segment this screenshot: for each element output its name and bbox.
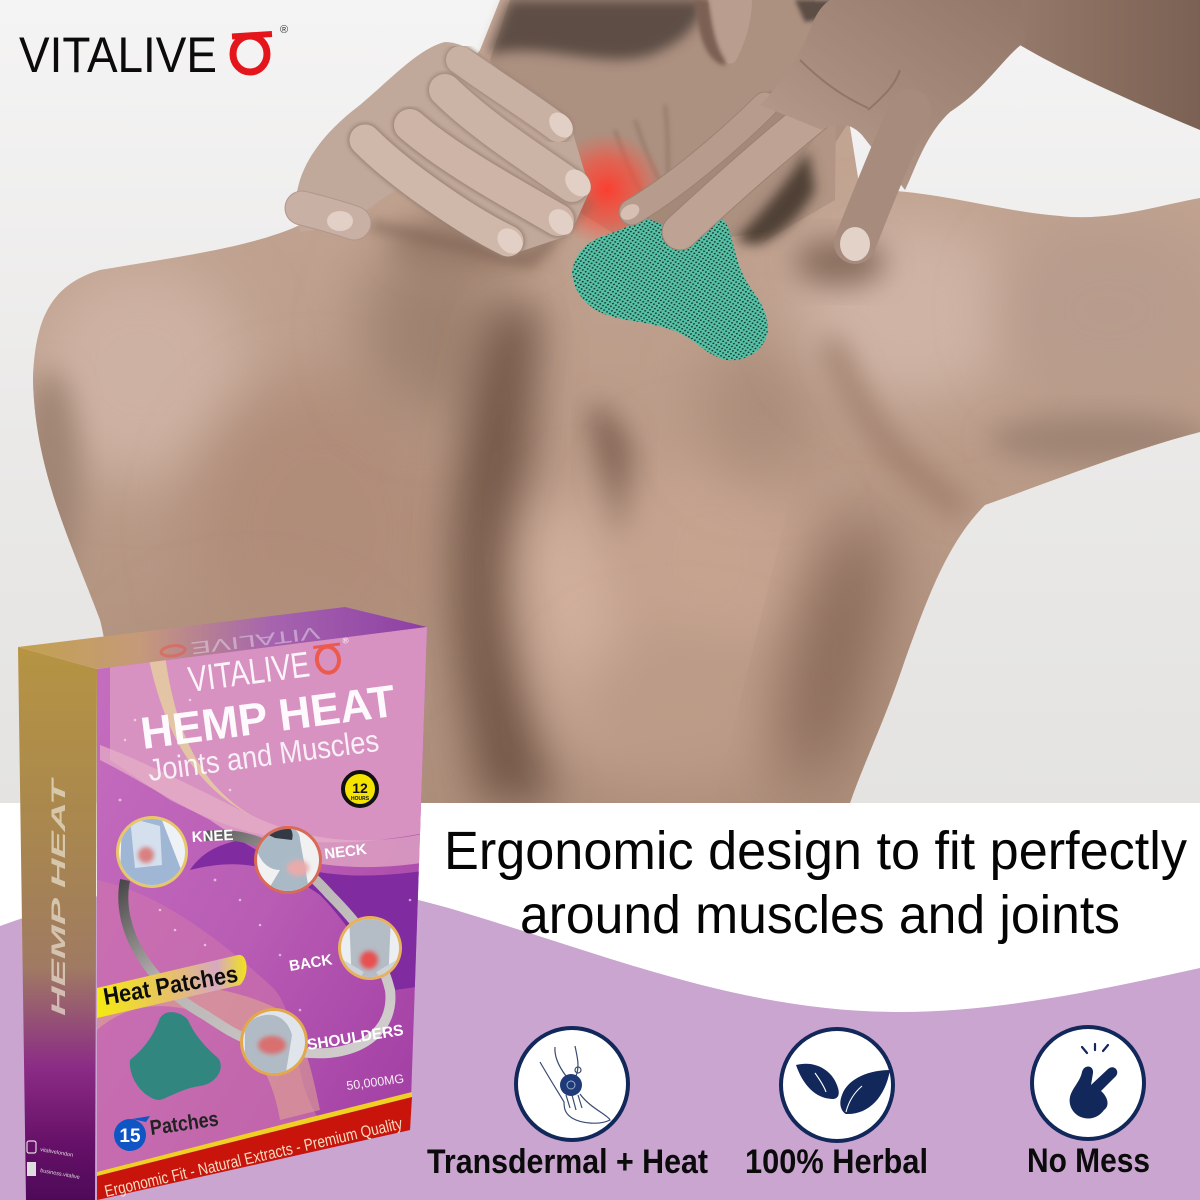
red pain glow xyxy=(549,132,665,248)
headline xyxy=(444,821,1187,945)
box top flap xyxy=(18,607,427,669)
thumb xyxy=(855,110,910,243)
body part labels: BACK xyxy=(288,951,334,975)
right hand and forearm xyxy=(618,0,1200,261)
neck wrinkles xyxy=(615,105,668,205)
social icons: business.vitalive xyxy=(40,1168,80,1181)
label: Transdermal + Heat xyxy=(427,1143,708,1181)
knuckle lines xyxy=(800,60,900,110)
ring finger xyxy=(445,90,572,186)
box brand: VITALIVE xyxy=(186,643,312,700)
fingernails xyxy=(327,108,596,259)
headline: Ergonomic design to fit perfectly xyxy=(444,821,1187,881)
strip text: Ergonomic Fit - Natural Extracts - Premium Quality xyxy=(103,1115,405,1200)
benefit: transdermal + heat xyxy=(427,1028,708,1181)
photo background xyxy=(0,0,1200,804)
forearm xyxy=(1015,0,1200,130)
body part labels: KNEE xyxy=(191,827,234,846)
box title: HEMP HEAT xyxy=(138,675,398,759)
icon: finger snap xyxy=(1032,1027,1144,1139)
back of hand xyxy=(760,0,1025,190)
heat patches pill xyxy=(97,955,247,1018)
logo wordmark: VITALIVE xyxy=(19,27,217,83)
shoulder photo xyxy=(240,1008,310,1078)
dosage: 50,000MG xyxy=(346,1072,405,1093)
white lower section xyxy=(0,803,1200,1200)
shadow under fingers xyxy=(370,200,590,262)
patch illustration xyxy=(130,1012,221,1100)
middle finger xyxy=(680,110,820,232)
15 patches badge: Patches xyxy=(148,1108,220,1140)
neck photo xyxy=(254,826,322,894)
palm xyxy=(296,42,590,255)
15 patches badge: 15 xyxy=(119,1126,141,1147)
torso and shoulders xyxy=(0,0,1200,804)
product box xyxy=(18,607,440,1200)
upside-down brand on flap xyxy=(160,623,321,661)
side label: HEMP HEAT xyxy=(49,777,70,1016)
knee photo xyxy=(115,815,190,890)
pinky xyxy=(460,60,558,128)
label: 100% Herbal xyxy=(745,1143,928,1181)
social icons: vitalivelondon xyxy=(40,1147,74,1159)
index finger xyxy=(632,105,765,212)
yellow stripe xyxy=(97,1092,412,1176)
hair xyxy=(488,0,705,59)
index fingernail xyxy=(618,201,642,223)
logo xyxy=(19,24,288,83)
icon: leaves xyxy=(781,1029,893,1141)
thumb nail xyxy=(840,227,870,261)
box subtitle: Joints and Muscles xyxy=(146,723,381,788)
body part labels: NECK xyxy=(323,841,368,863)
ring connecting circles xyxy=(123,835,390,1053)
12 hours badge: HOURS xyxy=(351,796,370,802)
upside-down brand on flap: VITALIVE xyxy=(190,623,321,658)
ear shadow xyxy=(695,0,725,66)
12 hours badge xyxy=(343,772,377,806)
hair right of ear xyxy=(795,0,850,22)
logo mark xyxy=(232,34,272,72)
icon: ankle with heat patch xyxy=(516,1028,628,1140)
purple wave xyxy=(0,880,1200,1200)
left hand xyxy=(296,42,596,262)
white sparkle dots xyxy=(119,699,411,1011)
pill text: Heat Patches xyxy=(101,961,240,1011)
jaw xyxy=(762,110,836,243)
headline: around muscles and joints xyxy=(520,885,1120,945)
middle finger xyxy=(410,125,558,220)
photo: man's back with neck pain xyxy=(0,0,1200,804)
body part labels: SHOULDERS xyxy=(306,1022,405,1054)
ear xyxy=(708,0,752,63)
social icons xyxy=(27,1141,80,1181)
red strip xyxy=(97,1097,412,1200)
body part labels xyxy=(191,827,405,1054)
15 patches badge xyxy=(114,1108,220,1151)
fill between fingers xyxy=(632,90,825,232)
heat patch on neck xyxy=(572,208,768,360)
label: No Mess xyxy=(1027,1142,1150,1180)
box front xyxy=(90,620,440,1200)
index finger xyxy=(365,140,508,241)
registered mark: ® xyxy=(280,24,288,36)
12 hours badge: 12 xyxy=(352,780,368,796)
neck xyxy=(490,0,850,250)
benefit: no mess xyxy=(1027,1027,1150,1180)
benefit: 100% herbal xyxy=(745,1029,928,1181)
box left side xyxy=(18,647,97,1200)
thumb xyxy=(302,208,354,223)
back photo xyxy=(338,916,402,980)
beard xyxy=(735,150,815,245)
box brand: ® xyxy=(342,636,349,646)
